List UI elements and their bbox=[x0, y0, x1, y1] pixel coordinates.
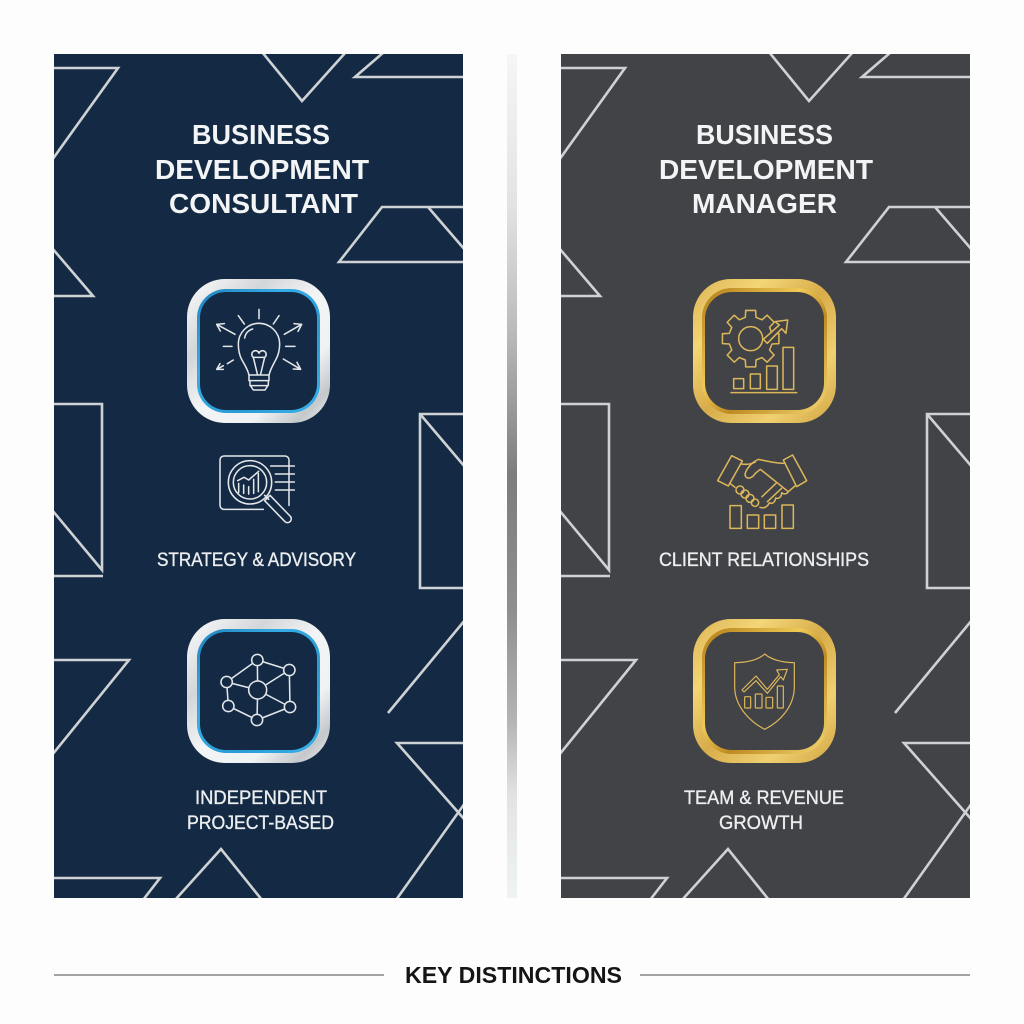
label: independent project-based bbox=[187, 788, 334, 834]
title: MANAGER bbox=[692, 188, 837, 219]
footer: key distinctions: KEY DISTINCTIONS bbox=[405, 962, 622, 988]
title: DEVELOPMENT bbox=[155, 154, 369, 185]
label: strategy and advisory: STRATEGY & ADVISORY bbox=[157, 550, 356, 571]
label: independent project-based: PROJECT-BASED bbox=[187, 813, 334, 834]
icon frame: lightbulb bbox=[187, 279, 330, 423]
panel background charcoal bbox=[561, 54, 970, 898]
panel: business development manager bbox=[559, 52, 972, 900]
icon frame: network bbox=[187, 619, 330, 763]
label: independent project-based: INDEPENDENT bbox=[195, 788, 327, 809]
title: BUSINESS bbox=[192, 119, 330, 150]
icon: lightbulb with arrows bbox=[217, 309, 302, 390]
icon frame: shield bbox=[693, 619, 836, 763]
icon frame: gear and chart bbox=[693, 279, 836, 423]
label: client relationships: CLIENT RELATIONSHIPS bbox=[659, 550, 869, 571]
title: CONSULTANT bbox=[169, 188, 358, 219]
geometric line pattern bbox=[559, 52, 972, 900]
panel background navy bbox=[54, 54, 463, 898]
icon: handshake over bars bbox=[718, 455, 807, 528]
label: team and revenue growth: GROWTH bbox=[719, 813, 803, 834]
panel: business development consultant bbox=[52, 52, 465, 900]
icon: node network bbox=[221, 654, 296, 726]
label: team and revenue growth: TEAM & REVENUE bbox=[684, 788, 844, 809]
icon: shield with growth arrow bbox=[735, 654, 794, 729]
label: team and revenue growth bbox=[684, 788, 844, 834]
title: BUSINESS bbox=[696, 119, 833, 150]
title bbox=[659, 119, 873, 219]
center divider bbox=[507, 54, 517, 898]
icon: magnifier over chart document bbox=[220, 456, 294, 523]
title bbox=[155, 119, 369, 219]
geometric line pattern bbox=[52, 52, 465, 900]
title: DEVELOPMENT bbox=[659, 154, 873, 185]
icon: gear with rising bars bbox=[722, 310, 797, 393]
